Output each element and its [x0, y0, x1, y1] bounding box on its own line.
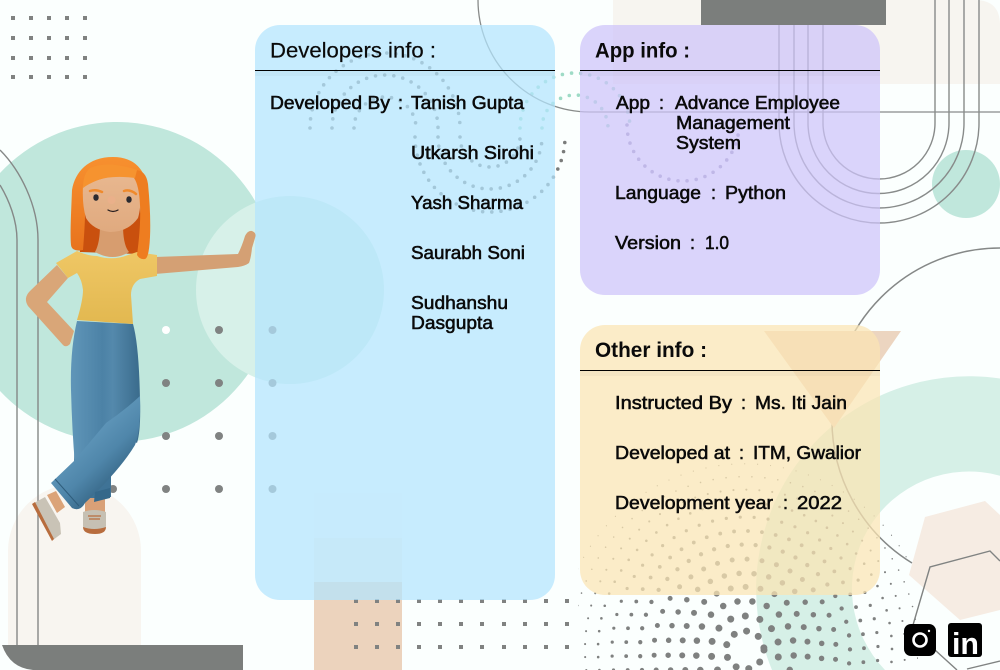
- peach triangle: [764, 331, 901, 428]
- left arch lines: [0, 150, 38, 645]
- left arm: [26, 265, 74, 346]
- beige arch: [8, 484, 141, 645]
- hair right side: [134, 170, 150, 259]
- developers list: Developed By: [270, 93, 390, 113]
- character: woman leaning on panel: [26, 157, 256, 541]
- light green circle: [196, 196, 384, 384]
- mouth: [108, 210, 118, 212]
- neck: [95, 225, 129, 257]
- app details: Version: [615, 233, 681, 253]
- panel: other info: [580, 325, 880, 595]
- developers list: Yash Sharma: [411, 193, 524, 213]
- large round dots grid: [109, 326, 276, 493]
- heading: other info: Other info :: [595, 339, 707, 362]
- back leg: [74, 400, 111, 500]
- dotted wave rings: [310, 53, 739, 212]
- shirt: [56, 251, 157, 324]
- other details: [615, 393, 861, 513]
- app details: :: [711, 183, 716, 203]
- app details: 1.0: [705, 233, 729, 253]
- other details: :: [741, 393, 746, 413]
- hexagon outline: [913, 551, 1000, 670]
- app details: [615, 93, 840, 253]
- developers list: Dasgupta: [411, 313, 494, 333]
- thin arc and horizontal line: [478, 0, 1000, 112]
- big green circle: [0, 122, 277, 442]
- other details: 2022: [797, 493, 842, 513]
- developers list: Utkarsh Sirohi: [411, 143, 534, 163]
- gray bar bottom left: [2, 645, 243, 670]
- heading: developers info: Developers info :: [270, 40, 436, 62]
- panel: developers info: [255, 25, 555, 600]
- right arm and hand: [155, 231, 256, 274]
- app details: Advance Employee: [675, 93, 840, 113]
- app details: Language: [615, 183, 701, 203]
- beige hexagon: [909, 501, 1000, 620]
- right foot: [83, 498, 106, 534]
- developers list: [270, 93, 534, 333]
- bottom square dots: [354, 599, 569, 649]
- back hair: [78, 205, 142, 254]
- gray bar top: [701, 0, 886, 25]
- other details: ITM, Gwalior: [753, 443, 861, 463]
- panel: app info: [580, 25, 880, 295]
- other details: :: [783, 493, 788, 513]
- other details: Developed at: [615, 443, 730, 463]
- eyebrows: [90, 190, 136, 194]
- app details: :: [659, 93, 664, 113]
- hair crown and left side: [71, 157, 147, 250]
- developers list: :: [398, 93, 403, 113]
- left foot: [32, 491, 65, 541]
- developers list: Tanish Gupta: [411, 93, 525, 113]
- large gray circle arc: [832, 248, 1000, 563]
- crossing leg: [51, 396, 140, 509]
- cuff: [55, 479, 79, 506]
- eyes: [93, 194, 99, 201]
- app details: System: [676, 133, 741, 153]
- other details: Ms. Iti Jain: [755, 393, 847, 413]
- small green circle: [932, 150, 1000, 218]
- nose: [108, 196, 116, 204]
- app details: Python: [725, 183, 786, 203]
- top-left square dots: [11, 16, 87, 79]
- app details: :: [690, 233, 695, 253]
- jeans: [71, 321, 140, 470]
- developers list: Sudhanshu: [411, 293, 508, 313]
- other details: :: [739, 443, 744, 463]
- other details: Development year: [615, 493, 773, 513]
- back cuff line: [94, 488, 110, 502]
- fringe: [83, 164, 137, 188]
- heading: app info: App info :: [595, 40, 690, 62]
- concentric U lines: [779, 0, 979, 223]
- peach stepped rectangle: [314, 493, 402, 670]
- other details: Instructed By: [615, 393, 732, 413]
- app details: Management: [676, 113, 790, 133]
- halftone dots: [559, 464, 931, 670]
- face: [83, 175, 141, 232]
- icon: linkedin: in: [952, 626, 979, 661]
- icon: instagram: [904, 624, 936, 656]
- developers list: Saurabh Soni: [411, 243, 525, 263]
- beige block top right: [613, 0, 1000, 84]
- green ring: [756, 376, 1000, 670]
- app details: App: [616, 93, 650, 113]
